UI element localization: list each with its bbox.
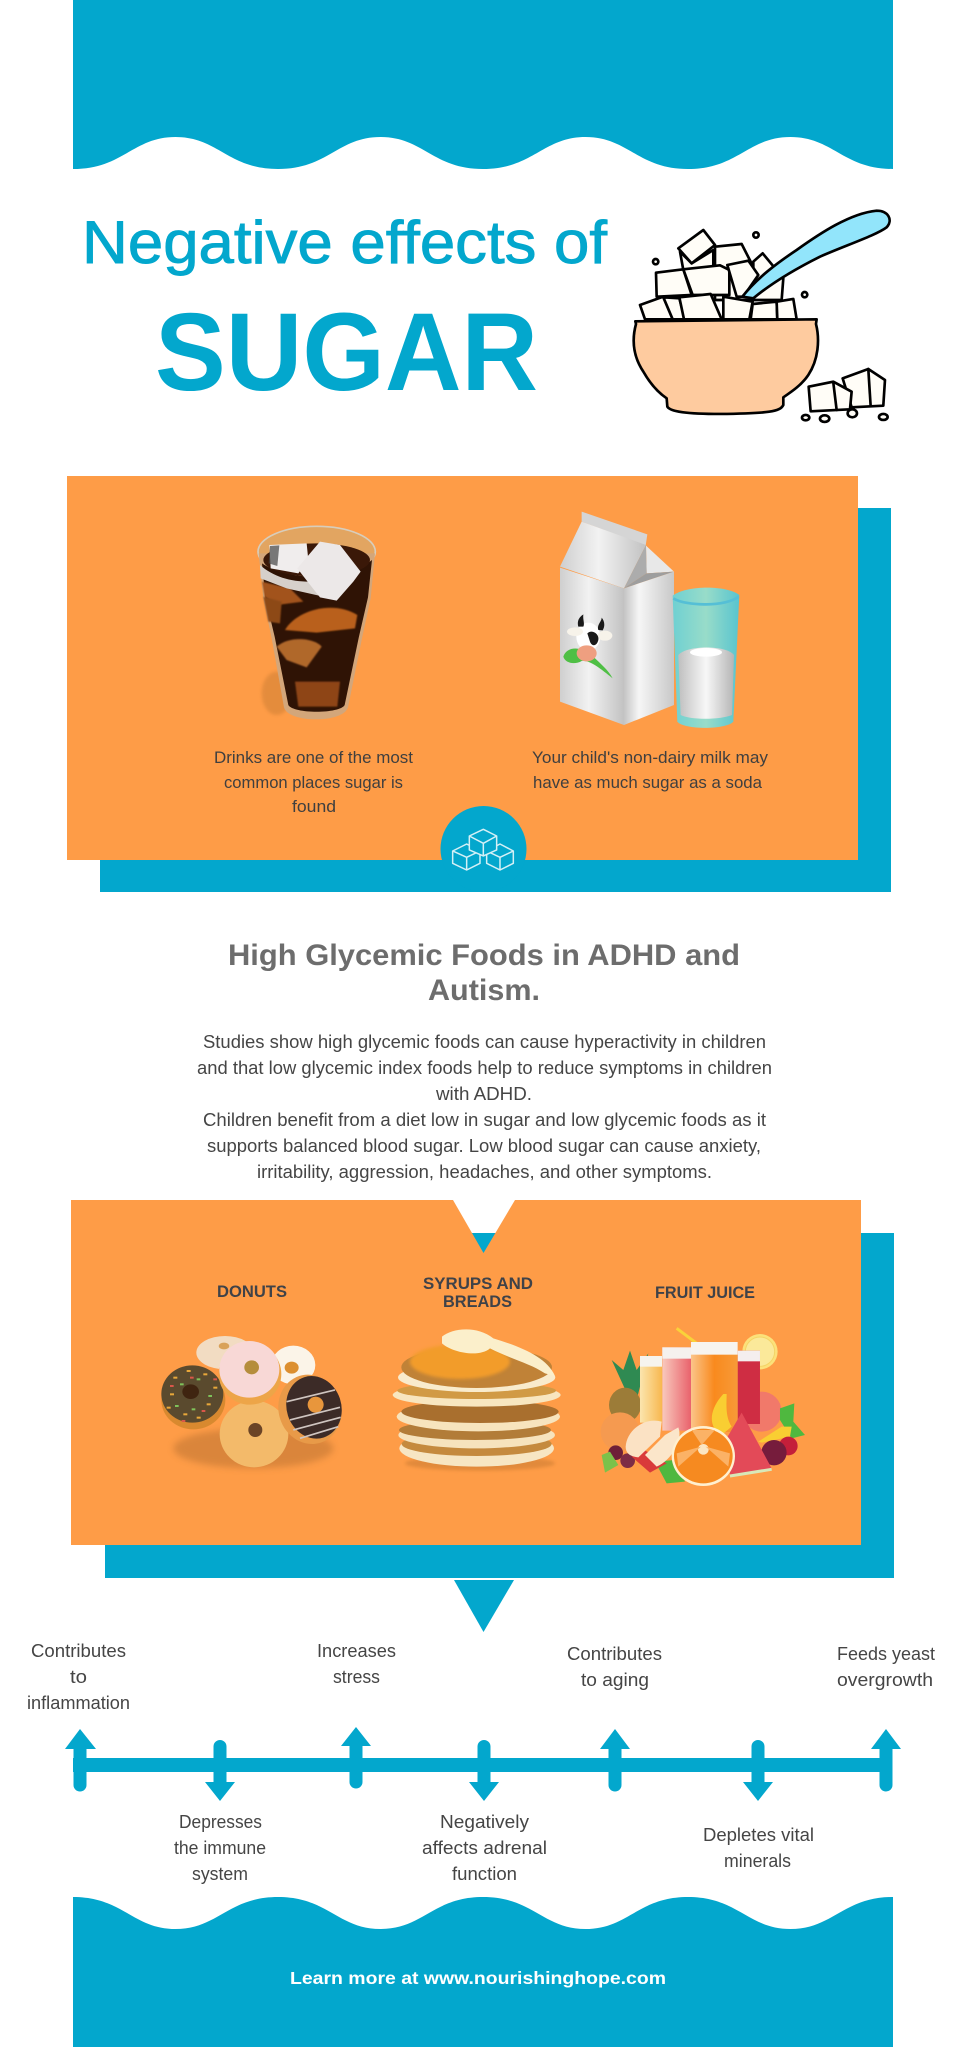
arrow down 2 bbox=[205, 1740, 235, 1801]
icon: sugar cubes badge bbox=[440, 806, 526, 892]
text: drinks caption: Drinks are one of the most bbox=[214, 748, 413, 767]
label: syrups and breads bbox=[423, 1274, 533, 1311]
panel: high glycemic foods bbox=[71, 1200, 894, 1578]
effect: immune system bbox=[174, 1811, 266, 1884]
effect: stress: stress bbox=[333, 1666, 380, 1687]
effect: immune system: Depresses bbox=[179, 1811, 262, 1832]
effect: inflammation: Contributes bbox=[31, 1640, 126, 1661]
panel: drinks bbox=[67, 476, 891, 892]
bottom wave banner bbox=[73, 1897, 893, 2047]
arrow up 3 bbox=[341, 1727, 371, 1789]
image: fruit juice bbox=[601, 1328, 805, 1486]
effect: minerals: minerals bbox=[724, 1850, 791, 1871]
label: syrups and breads: SYRUPS AND bbox=[423, 1274, 533, 1293]
text: drinks caption bbox=[214, 748, 413, 816]
heading: Autism. bbox=[428, 974, 540, 1007]
text: drinks caption: found bbox=[292, 797, 336, 816]
effect: adrenal function: function bbox=[452, 1863, 517, 1884]
effect: adrenal function: affects adrenal bbox=[422, 1837, 547, 1858]
icon: bowl of sugar cubes with spoon bbox=[634, 211, 890, 422]
effect: adrenal function bbox=[422, 1811, 547, 1884]
arrow up 1 bbox=[65, 1729, 96, 1792]
effect: immune system: system bbox=[192, 1863, 248, 1884]
title: Negative effects of bbox=[82, 209, 607, 276]
text: milk caption bbox=[532, 748, 769, 792]
text block: glycemic foods explanation: with ADHD. bbox=[435, 1083, 532, 1104]
heading bbox=[228, 939, 740, 1007]
effect: adrenal function: Negatively bbox=[440, 1811, 530, 1832]
effect: aging bbox=[567, 1643, 662, 1690]
heading: High Glycemic Foods in ADHD and bbox=[228, 939, 740, 972]
icon: glass of cola bbox=[258, 526, 375, 719]
arrow: pointer down to effects bbox=[454, 1580, 514, 1632]
effect: inflammation bbox=[27, 1640, 130, 1713]
top wave banner bbox=[73, 0, 893, 169]
label: fruit juice: FRUIT JUICE bbox=[655, 1283, 755, 1302]
title: SUGAR bbox=[155, 291, 538, 414]
effect: stress bbox=[317, 1640, 396, 1687]
image: pancakes bbox=[393, 1329, 561, 1471]
text block: glycemic foods explanation: Studies show high glycemic foods can cause hyperactivity in children bbox=[203, 1031, 766, 1052]
text block: glycemic foods explanation: supports balanced blood sugar. Low blood sugar can cause anxiety, bbox=[207, 1135, 761, 1156]
effect: yeast overgrowth: overgrowth bbox=[837, 1669, 933, 1690]
text block: glycemic foods explanation bbox=[197, 1031, 772, 1182]
label: donuts: DONUTS bbox=[217, 1282, 287, 1301]
effect: stress: Increases bbox=[317, 1640, 396, 1661]
icon: milk carton and glass bbox=[560, 512, 739, 728]
text block: glycemic foods explanation: irritability, aggression, headaches, and other symptoms. bbox=[257, 1161, 712, 1182]
image: donuts bbox=[161, 1336, 351, 1468]
effect: minerals: Depletes vital bbox=[703, 1824, 814, 1845]
text: milk caption: Your child's non-dairy milk may bbox=[532, 748, 769, 767]
label: syrups and breads: BREADS bbox=[443, 1292, 512, 1311]
effect: yeast overgrowth bbox=[837, 1643, 935, 1690]
effect: aging: to aging bbox=[581, 1669, 649, 1690]
effect: minerals bbox=[703, 1824, 814, 1871]
arrow down 4 bbox=[469, 1740, 499, 1801]
timeline with arrows bbox=[65, 1727, 901, 1801]
footer link text: Learn more at www.nourishinghope.com bbox=[290, 1968, 666, 1988]
arrow up 5 bbox=[600, 1729, 630, 1792]
arrow down 6 bbox=[743, 1740, 773, 1801]
effect: yeast overgrowth: Feeds yeast bbox=[837, 1643, 935, 1664]
text: milk caption: have as much sugar as a soda bbox=[533, 773, 763, 792]
title bbox=[82, 209, 607, 414]
arrow up 7 bbox=[871, 1729, 901, 1792]
text block: glycemic foods explanation: and that low glycemic index foods help to reduce symptoms in children bbox=[197, 1057, 772, 1078]
effect: inflammation: inflammation bbox=[27, 1692, 130, 1713]
text block: glycemic foods explanation: Children benefit from a diet low in sugar and low glycemic foods as it bbox=[203, 1109, 766, 1130]
text: drinks caption: common places sugar is bbox=[224, 773, 403, 792]
effect: inflammation: to bbox=[70, 1666, 87, 1687]
effect: aging: Contributes bbox=[567, 1643, 662, 1664]
effect: immune system: the immune bbox=[174, 1837, 266, 1858]
